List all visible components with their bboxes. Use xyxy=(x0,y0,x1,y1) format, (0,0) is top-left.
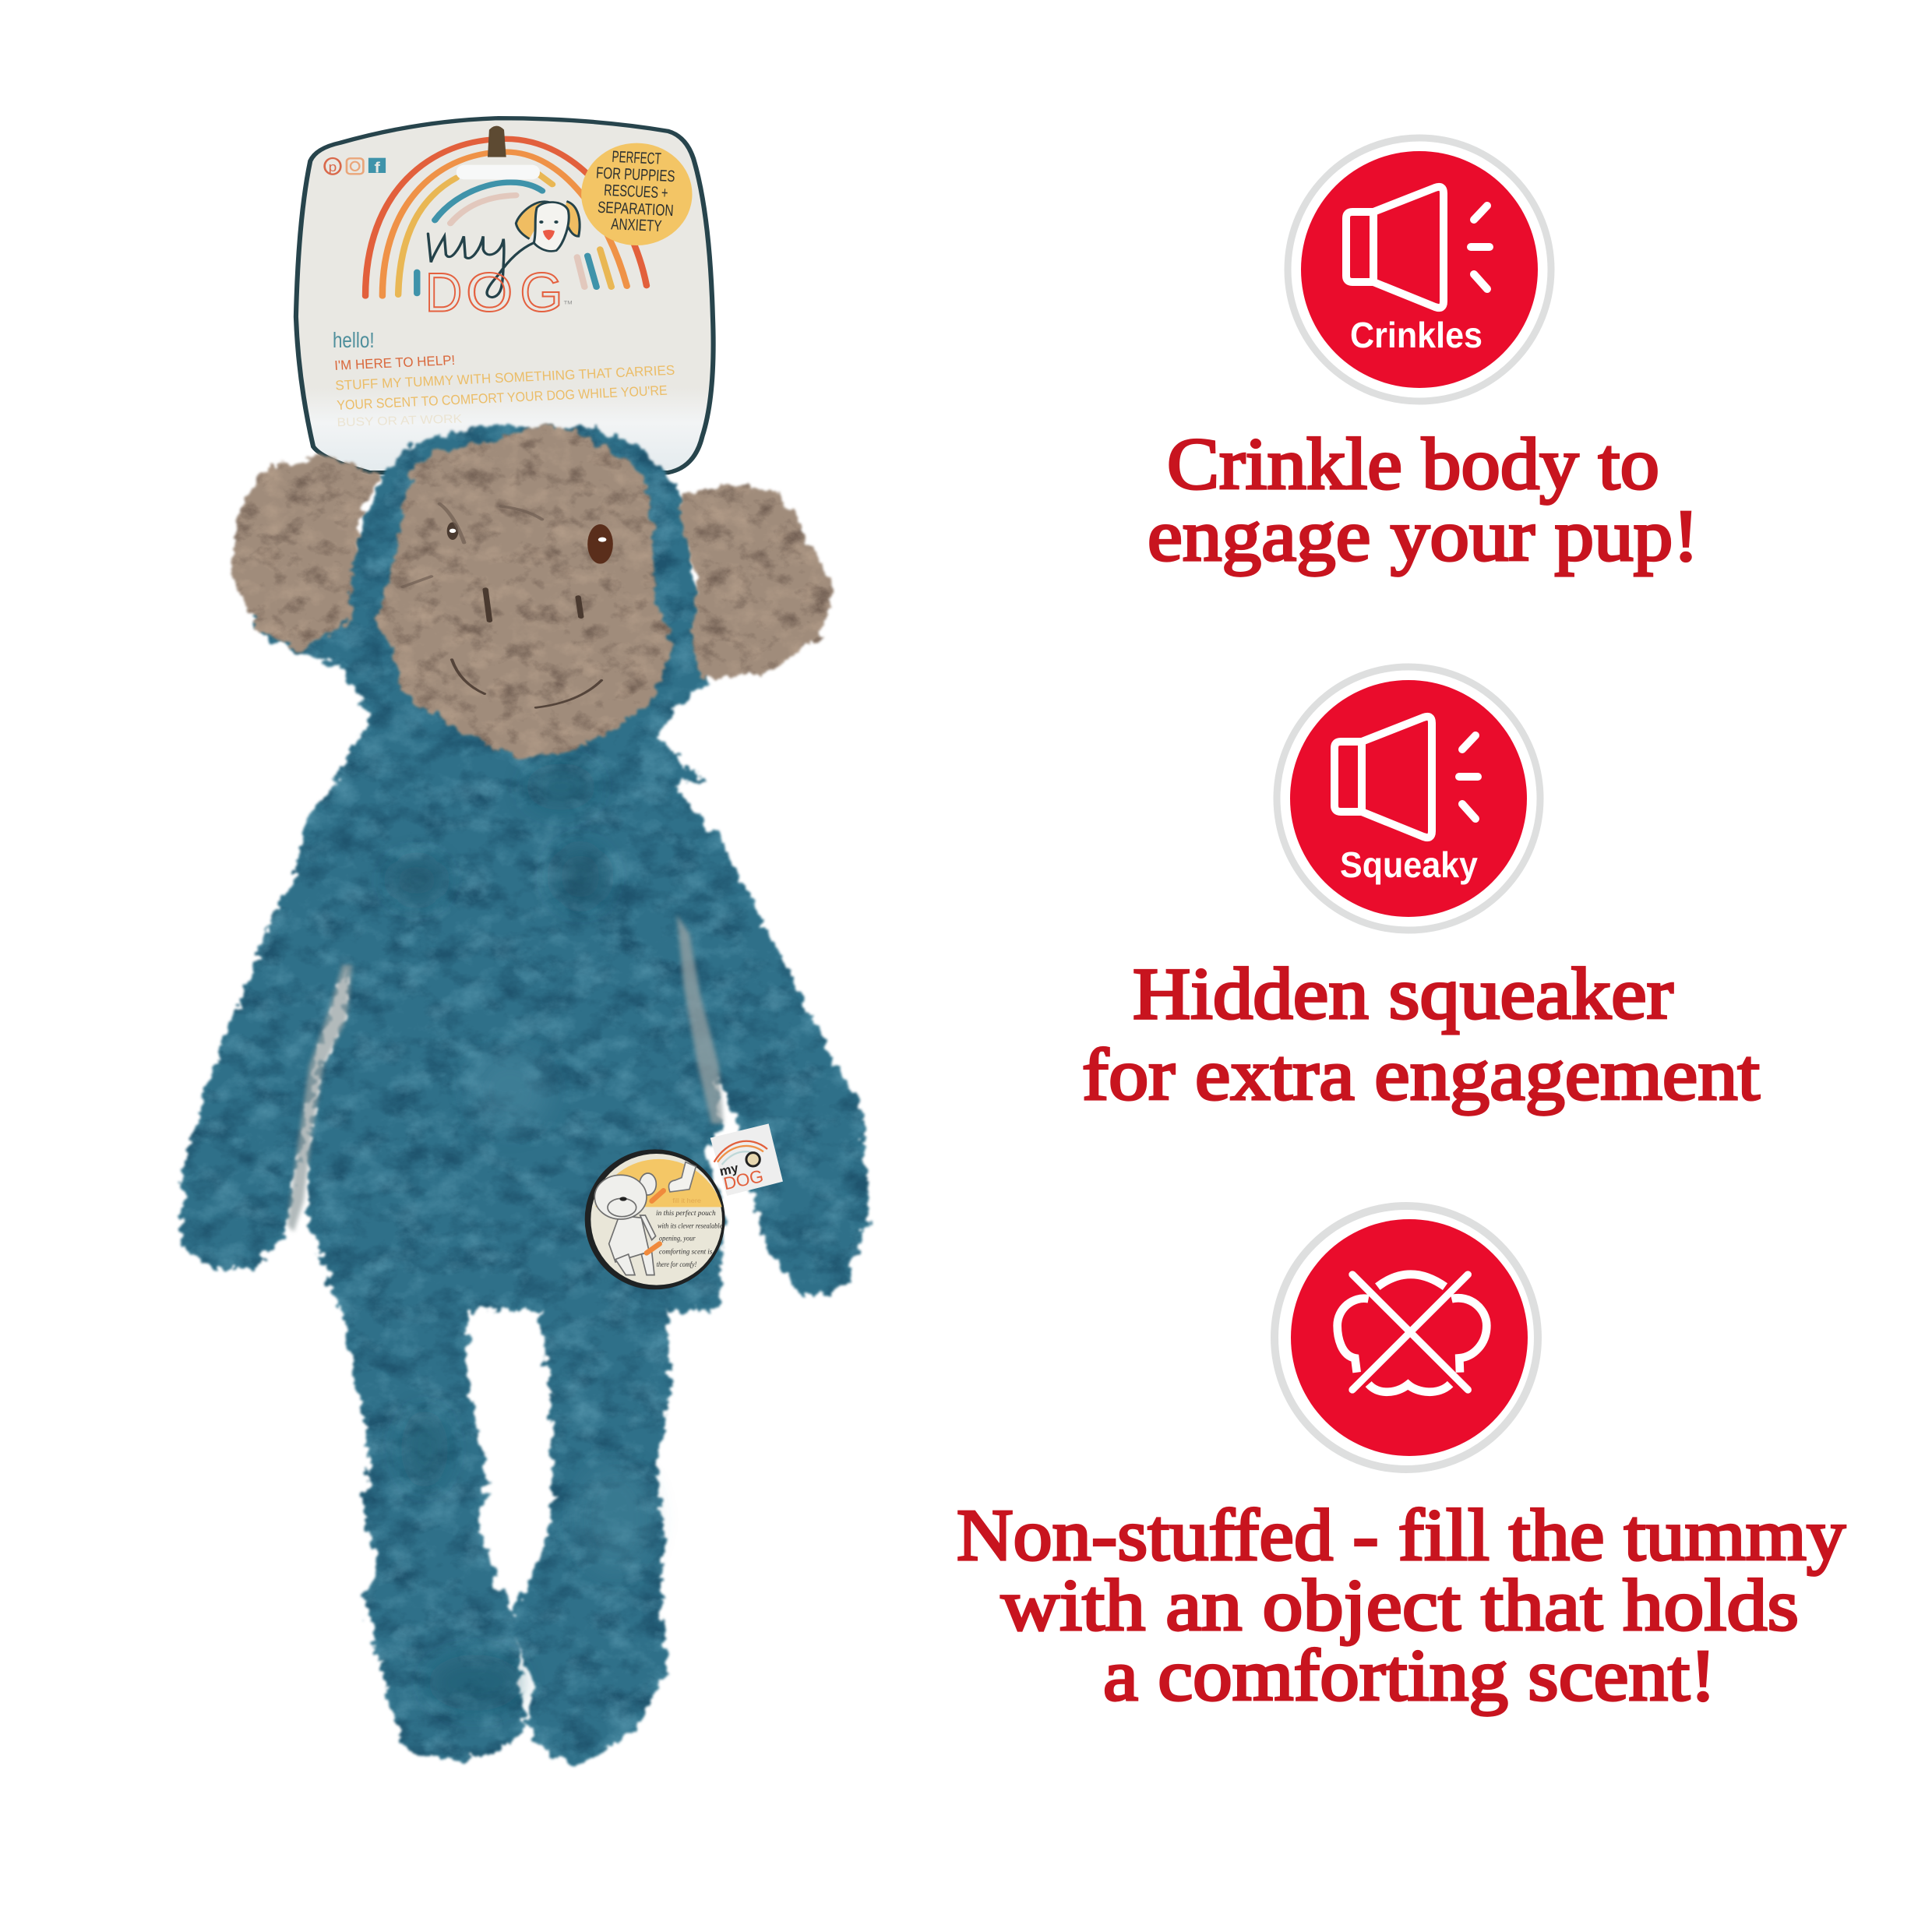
pouch text: comforting scent is xyxy=(659,1247,713,1256)
icon: squeaky speaker badge: Squeaky xyxy=(1340,844,1478,885)
heading: non-stuffed: with an object that holds xyxy=(1001,1565,1799,1646)
my DOG logo xyxy=(425,201,580,323)
feature 3: non-stuffed xyxy=(957,1206,1846,1716)
feature 2: squeaky xyxy=(1082,667,1760,1116)
small sewn logo label xyxy=(710,1123,783,1196)
yellow sticker: RESCUES + xyxy=(604,181,668,202)
my DOG logo: D xyxy=(425,262,462,323)
legs traced xyxy=(327,1278,670,1764)
monkey tan ears and face xyxy=(232,425,831,758)
heading: non-stuffed xyxy=(957,1495,1846,1716)
feature 1: crinkles xyxy=(1148,138,1699,576)
grey shadow gaps between limbs xyxy=(287,915,724,1232)
heading: hidden squeaker: for extra engagement xyxy=(1082,1035,1760,1116)
heading: non-stuffed: Non-stuffed - fill the tummy xyxy=(957,1495,1846,1576)
my DOG logo: TM xyxy=(564,300,573,305)
icon: crinkle speaker badge: Crinkles xyxy=(1350,315,1482,355)
monkey blue body fur xyxy=(182,428,869,1764)
social icons xyxy=(325,158,386,176)
heading: non-stuffed: a comforting scent! xyxy=(1103,1635,1716,1716)
small sewn logo label: DOG xyxy=(721,1165,765,1193)
darker and lighter fur clumps xyxy=(390,763,654,1711)
bear illustration xyxy=(594,1173,656,1275)
pouch text: with its clever resealable xyxy=(658,1222,723,1231)
hang slot and peg xyxy=(457,126,540,179)
heading: crinkle body xyxy=(1148,424,1699,576)
sock illustration xyxy=(668,1162,696,1192)
icon: no stuffing badge xyxy=(1274,1206,1538,1469)
small sewn logo label: my xyxy=(718,1160,740,1179)
yellow sticker: SEPARATION xyxy=(597,198,674,220)
yellow sticker: PERFECT xyxy=(612,147,662,167)
pouch text: there for comfy! xyxy=(657,1260,696,1269)
card outline xyxy=(296,118,714,473)
my DOG logo: O xyxy=(466,262,513,323)
heading: crinkle body: Crinkle body to xyxy=(1167,424,1659,505)
monkey facial features xyxy=(403,504,613,707)
tag copy: YOUR SCENT TO COMFORT YOUR DOG WHILE YOU'RE xyxy=(337,383,668,413)
icon: squeaky speaker badge xyxy=(1277,667,1540,930)
icon: crinkle speaker badge xyxy=(1288,138,1551,401)
tag copy: hello! xyxy=(333,329,375,352)
arrows xyxy=(647,1190,664,1253)
social icons: p xyxy=(329,160,337,175)
head back traced xyxy=(251,428,706,781)
tag copy: BUSY OR AT WORK xyxy=(337,412,462,429)
heading: hidden squeaker: Hidden squeaker xyxy=(1133,954,1673,1035)
yellow sticker: ANXIETY xyxy=(611,215,662,235)
yellow sticker xyxy=(581,143,693,245)
tag copy: I'M HERE TO HELP! xyxy=(334,352,456,373)
pouch text: opening, your xyxy=(659,1235,696,1243)
social icons: f xyxy=(375,160,380,176)
round pouch info tag: fill it here xyxy=(672,1197,701,1204)
tag copy: STUFF MY TUMMY WITH SOMETHING THAT CARRIES xyxy=(335,362,675,393)
tag copy xyxy=(333,329,675,429)
torso and arms traced xyxy=(182,728,869,1310)
heading: hidden squeaker xyxy=(1082,954,1760,1116)
my DOG logo: G xyxy=(520,262,563,323)
pouch text xyxy=(656,1209,723,1269)
rainbow logo arcs xyxy=(365,139,647,296)
round pouch info tag xyxy=(585,1149,725,1289)
pouch text: in this perfect pouch xyxy=(656,1209,716,1218)
yellow sticker: FOR PUPPIES xyxy=(595,164,675,185)
hang tag card xyxy=(296,118,714,473)
heading: crinkle body: engage your pup! xyxy=(1148,495,1699,576)
product photo: plush monkey toy with hang tag xyxy=(182,118,869,1764)
